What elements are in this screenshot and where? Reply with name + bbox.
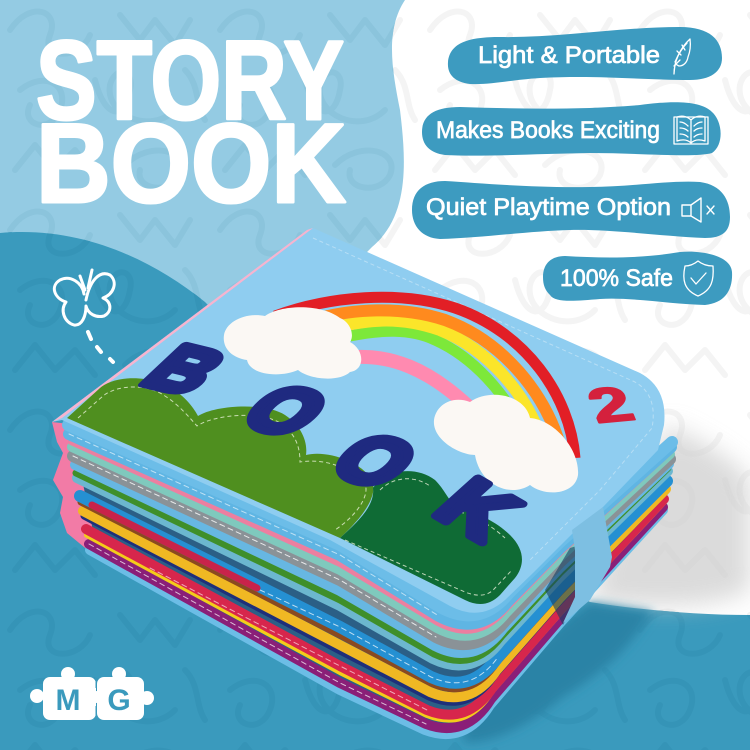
strap shadow: [545, 545, 580, 625]
logo: MG puzzle pieces: M: [56, 684, 80, 717]
callout: 100% safe: 100% Safe: [560, 265, 673, 292]
icon: feather: [674, 39, 690, 74]
book: [52, 228, 672, 734]
page stack spine: [52, 422, 95, 552]
book title letters: B: [125, 332, 245, 408]
left hill: [67, 378, 373, 538]
book title letters: O: [313, 419, 436, 503]
callout: quiet playtime option: [412, 181, 730, 239]
page stack: [68, 425, 672, 734]
callout: quiet playtime option: Quiet Playtime Option: [426, 194, 671, 221]
cover stitching: [313, 238, 653, 560]
book shadow on white: [590, 425, 750, 606]
right cloud: [434, 395, 578, 492]
callout: light and portable: Light & Portable: [478, 42, 660, 69]
book title letters: K: [418, 463, 538, 555]
callout: makes books exciting: [422, 102, 721, 156]
callout: light and portable: [448, 27, 722, 84]
right hill: [340, 471, 522, 604]
stack base: [68, 425, 672, 734]
book title letters: O: [224, 370, 348, 451]
red tab: [92, 505, 257, 588]
icon: open book: [674, 116, 708, 144]
rainbow: [275, 297, 575, 458]
book title letters: [125, 332, 538, 555]
hill stitching: [78, 387, 512, 595]
callout: 100% safe: [543, 252, 732, 305]
left cloud: [224, 307, 361, 379]
logo: MG puzzle pieces: [30, 667, 154, 720]
icon: muted speaker: [682, 198, 714, 222]
title: STORY: [36, 18, 344, 143]
icon: butterfly with dotted trail: [54, 270, 114, 362]
front cover: [52, 228, 664, 613]
title: BOOK: [36, 101, 346, 226]
cover pink edge: [52, 228, 313, 422]
number two: 2: [580, 377, 642, 434]
strap: [563, 507, 612, 623]
logo: MG puzzle pieces: G: [107, 684, 131, 717]
callout: makes books exciting: Makes Books Exciting: [436, 117, 660, 144]
title: [36, 18, 346, 226]
book shadow on teal: [463, 602, 653, 742]
icon: shield: [684, 261, 713, 296]
